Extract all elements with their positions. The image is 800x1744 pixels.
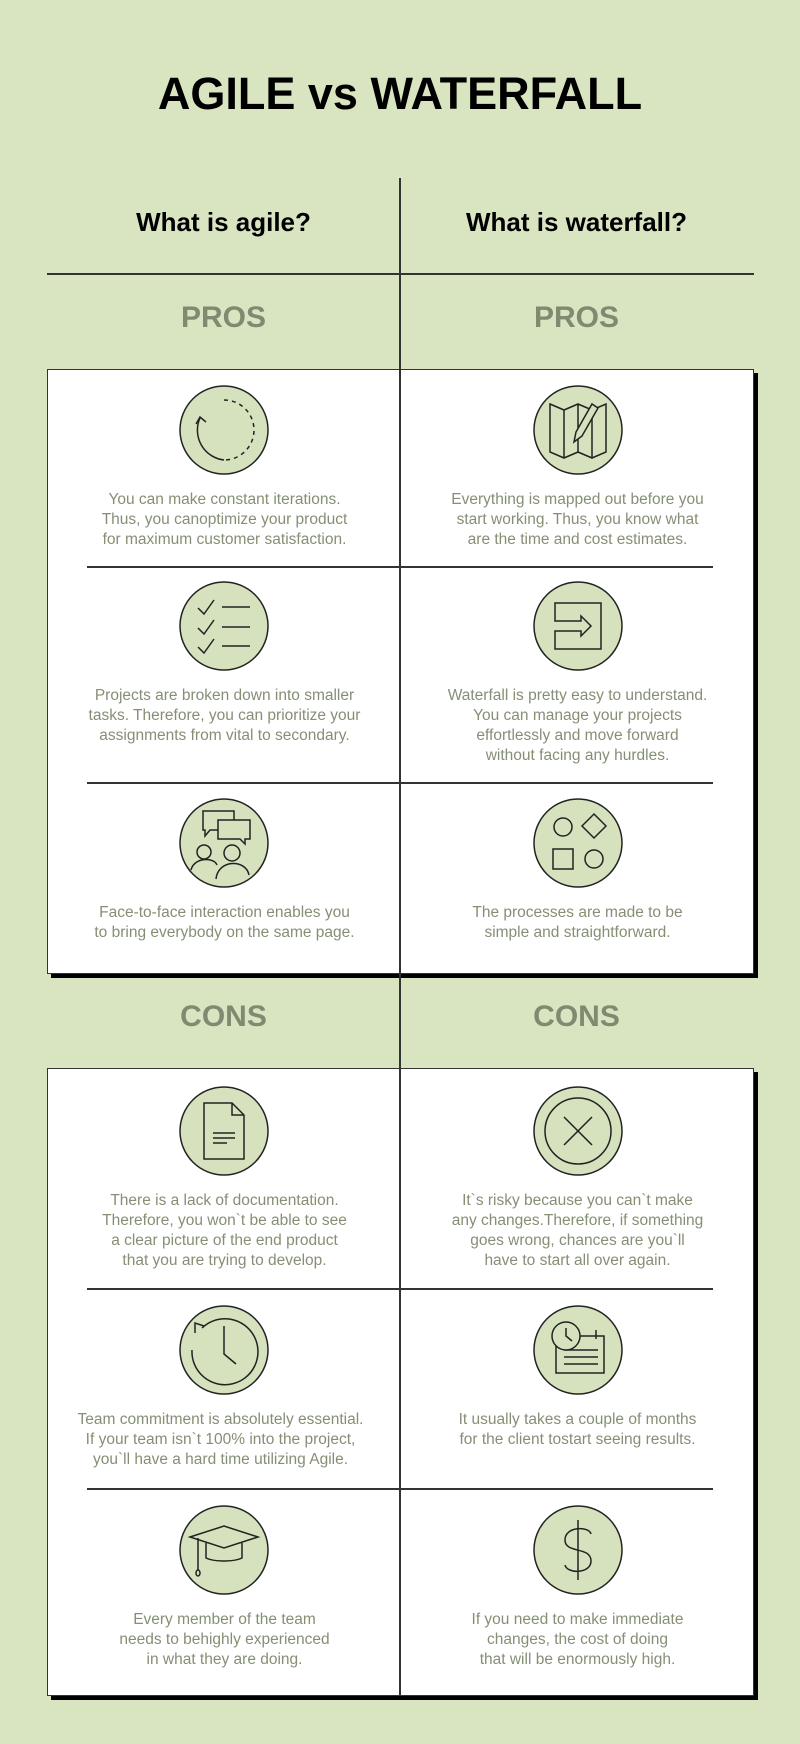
text: agile pro 3: Face-to-face interaction enables you	[99, 904, 350, 921]
text: agile pro 2	[88, 687, 360, 744]
text: agile con 1: There is a lack of documentation.	[110, 1192, 339, 1209]
text: waterfall con 1: goes wrong, chances are you`ll	[470, 1232, 685, 1249]
heading: pros waterfall: PROS	[534, 301, 619, 334]
text: waterfall con 1: any changes.Therefore, if something	[452, 1212, 703, 1229]
icon: people chat	[179, 798, 269, 888]
text: waterfall pro 3: simple and straightforward.	[484, 924, 671, 941]
vertical divider	[399, 178, 400, 1696]
icon: iteration cycle	[179, 385, 269, 475]
text: waterfall pro 3: The processes are made to be	[472, 904, 683, 921]
text: agile pro 1: You can make constant iterations.	[108, 491, 341, 508]
text: agile pro 1: Thus, you canoptimize your product	[102, 511, 347, 528]
heading: cons agile: CONS	[180, 1000, 267, 1033]
text: agile con 3: needs to behighly experienced	[119, 1631, 330, 1648]
text: agile pro 3	[94, 904, 355, 941]
text: waterfall con 3: If you need to make immediate	[472, 1611, 683, 1628]
icon: cancel	[533, 1086, 623, 1176]
text: agile con 1	[102, 1192, 347, 1269]
panel: pros	[47, 369, 754, 974]
icon: map	[533, 385, 623, 475]
text: agile con 2: Team commitment is absolutely essential.	[77, 1411, 364, 1428]
icon: dollar	[533, 1505, 623, 1595]
text: waterfall con 3: changes, the cost of doing	[487, 1631, 668, 1648]
text: waterfall con 1	[452, 1192, 703, 1269]
text: waterfall con 2	[459, 1411, 696, 1448]
panel: cons	[47, 1068, 754, 1696]
heading: waterfall: What is waterfall?	[466, 207, 687, 237]
text: waterfall con 1: have to start all over again.	[484, 1252, 671, 1269]
text: agile pro 2: Projects are broken down into smaller	[95, 687, 354, 704]
icon: graduation cap	[179, 1505, 269, 1595]
text: waterfall pro 1: start working. Thus, you know what	[457, 511, 698, 528]
text: agile pro 1: for maximum customer satisfaction.	[103, 531, 346, 548]
text: waterfall pro 1	[451, 491, 704, 548]
text: waterfall pro 2: without facing any hurdles.	[486, 747, 669, 764]
text: waterfall con 1: It`s risky because you can`t make	[462, 1192, 693, 1209]
icon: clock	[179, 1305, 269, 1395]
text: agile con 2	[77, 1411, 364, 1468]
text: waterfall pro 1: are the time and cost estimates.	[468, 531, 687, 548]
text: waterfall pro 3	[472, 904, 683, 941]
icon: document	[179, 1086, 269, 1176]
text: waterfall pro 1: Everything is mapped out before you	[451, 491, 704, 508]
heading: cons waterfall: CONS	[533, 1000, 620, 1033]
text: waterfall pro 2	[448, 687, 707, 764]
text: agile con 3: in what they are doing.	[147, 1651, 302, 1668]
icon: enter arrow	[533, 581, 623, 671]
text: agile con 1: a clear picture of the end product	[111, 1232, 338, 1249]
text: agile con 1: Therefore, you won`t be able to see	[102, 1212, 347, 1229]
icon: calendar clock	[533, 1305, 623, 1395]
text: agile pro 2: tasks. Therefore, you can prioritize your	[89, 707, 360, 724]
text: agile con 2: you`ll have a hard time utilizing Agile.	[93, 1451, 348, 1468]
text: agile pro 3: to bring everybody on the same page.	[94, 924, 355, 941]
text: agile con 1: that you are trying to develop.	[122, 1252, 327, 1269]
text: agile con 3	[119, 1611, 330, 1668]
icon: shapes	[533, 798, 623, 888]
heading: agile: What is agile?	[136, 207, 311, 237]
text: waterfall con 3	[472, 1611, 683, 1668]
icon: checklist	[179, 581, 269, 671]
title: AGILE vs WATERFALL	[158, 68, 642, 119]
text: waterfall con 2: It usually takes a couple of months	[459, 1411, 696, 1428]
text: agile pro 2: assignments from vital to secondary.	[99, 727, 350, 744]
heading: pros agile: PROS	[181, 301, 266, 334]
text: agile pro 1	[102, 491, 348, 548]
text: waterfall pro 2: Waterfall is pretty easy to understand.	[448, 687, 707, 704]
text: waterfall pro 2: effortlessly and move forward	[476, 727, 679, 744]
text: waterfall con 3: that will be enormously high.	[480, 1651, 675, 1668]
text: agile con 3: Every member of the team	[133, 1611, 316, 1628]
text: waterfall pro 2: You can manage your projects	[473, 707, 682, 724]
text: agile con 2: If your team isn`t 100% into the project,	[86, 1431, 355, 1448]
text: waterfall con 2: for the client tostart seeing results.	[459, 1431, 696, 1448]
